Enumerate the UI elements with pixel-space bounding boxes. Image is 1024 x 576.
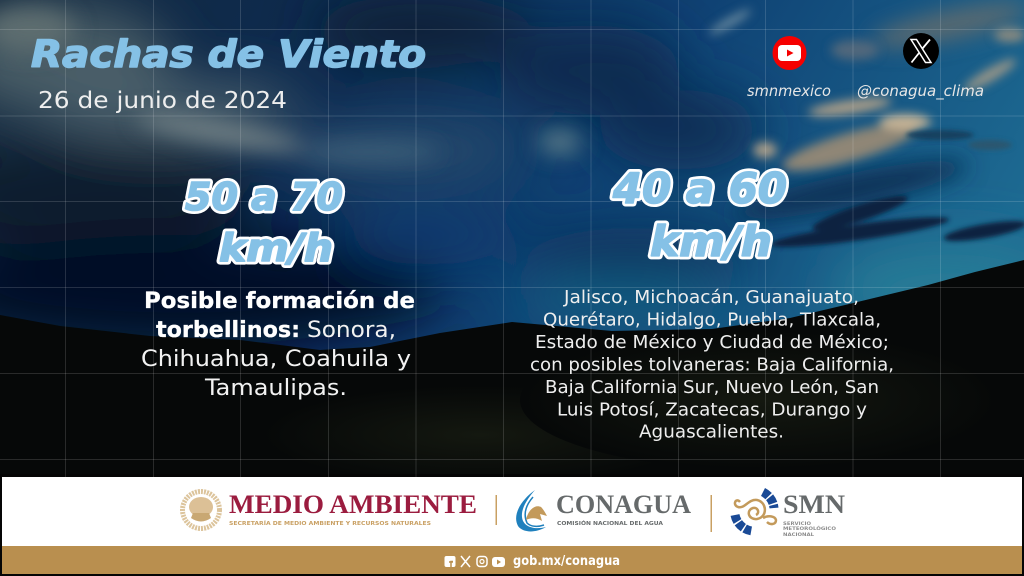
footer bar: web address — [2, 546, 1022, 574]
text: affected states, torbellinos: Posible formación de — [144, 289, 415, 314]
heading: wind speed range 50 a 70 km/h: 50 a 70 — [185, 175, 343, 219]
icon: YouTube — [772, 36, 806, 70]
icon: SMN logo — [735, 492, 776, 531]
title: Rachas de Viento — [31, 33, 426, 76]
heading: wind speed range 40 a 60 km/h: km/h — [650, 217, 772, 266]
heading: wind speed range 40 a 60 km/h — [612, 164, 787, 266]
footer: institutional logos — [2, 477, 1022, 546]
heading: wind speed range 50 a 70 km/h: 50 a 70 — [185, 175, 343, 219]
text: affected states, tolvaneras: con posibles tolvaneras: Baja California, — [530, 354, 894, 376]
heading: wind speed range 50 a 70 km/h — [185, 175, 343, 270]
date: 26 de junio de 2024 — [38, 88, 287, 114]
text: affected states, torbellinos: Chihuahua, Coahuila y — [141, 347, 411, 372]
logo text: SMN — [783, 490, 845, 538]
icons: social networks — [444, 556, 505, 567]
logo text: SMN: METEOROLÓGICO — [783, 525, 836, 532]
text: affected states, tolvaneras: Jalisco, Michoacán, Guanajuato, — [563, 287, 859, 308]
logo text: SMN: NACIONAL — [783, 532, 814, 538]
hills — [0, 260, 1024, 576]
logo text: Conagua: COMISIÓN NACIONAL DEL AGUA — [557, 520, 664, 527]
heading: wind speed range 50 a 70 km/h: km/h — [219, 226, 333, 270]
text: affected states, torbellinos: torbellinos: — [156, 318, 300, 343]
web address text: gob.mx/conagua — [513, 554, 620, 569]
panel: 50 a 70 km/h — [141, 175, 415, 401]
logo text: Conagua: CONAGUA — [556, 490, 691, 519]
text: affected states, tolvaneras: Aguascalientes. — [639, 422, 784, 442]
logo text: SMN: SMN — [783, 490, 845, 519]
icon: national seal — [182, 492, 220, 528]
heading: wind speed range 40 a 60 km/h: 40 a 60 — [612, 164, 787, 213]
icon: X — [903, 33, 939, 69]
text: affected states, tolvaneras: Querétaro, Hidalgo, Puebla, Tlaxcala, — [543, 310, 881, 330]
heading: wind speed range 50 a 70 km/h: km/h — [219, 226, 333, 270]
heading: wind speed range 40 a 60 km/h: 40 a 60 — [612, 164, 787, 213]
text: affected states, torbellinos: Tamaulipas. — [204, 376, 347, 401]
handle: smnmexico: smnmexico — [747, 82, 831, 100]
heading: wind speed range 40 a 60 km/h: km/h — [650, 217, 772, 266]
panel: 40 a 60 km/h — [530, 164, 894, 442]
text: affected states, tolvaneras: Luis Potosí, Zacatecas, Durango y — [557, 400, 867, 420]
text: affected states, tolvaneras: Estado de México y Ciudad de México; — [535, 332, 889, 353]
logo text: SMN: SERVICIO — [783, 521, 811, 527]
icon: Conagua logo — [516, 490, 547, 531]
text: affected states, torbellinos — [141, 289, 415, 401]
logo text: Medio Ambiente: MEDIO AMBIENTE — [229, 490, 477, 519]
social: X — [857, 33, 984, 101]
social: YouTube — [747, 36, 831, 100]
logo text: Medio Ambiente: SECRETARÍA DE MEDIO AMBIENTE Y RECURSOS NATURALES — [229, 519, 431, 527]
text: affected states, tolvaneras: Baja California Sur, Nuevo León, San — [545, 377, 879, 398]
handle: conagua_clima: @conagua_clima — [857, 82, 984, 101]
text: affected states, tolvaneras — [530, 287, 894, 442]
text: affected states, torbellinos: Sonora, — [307, 318, 396, 343]
